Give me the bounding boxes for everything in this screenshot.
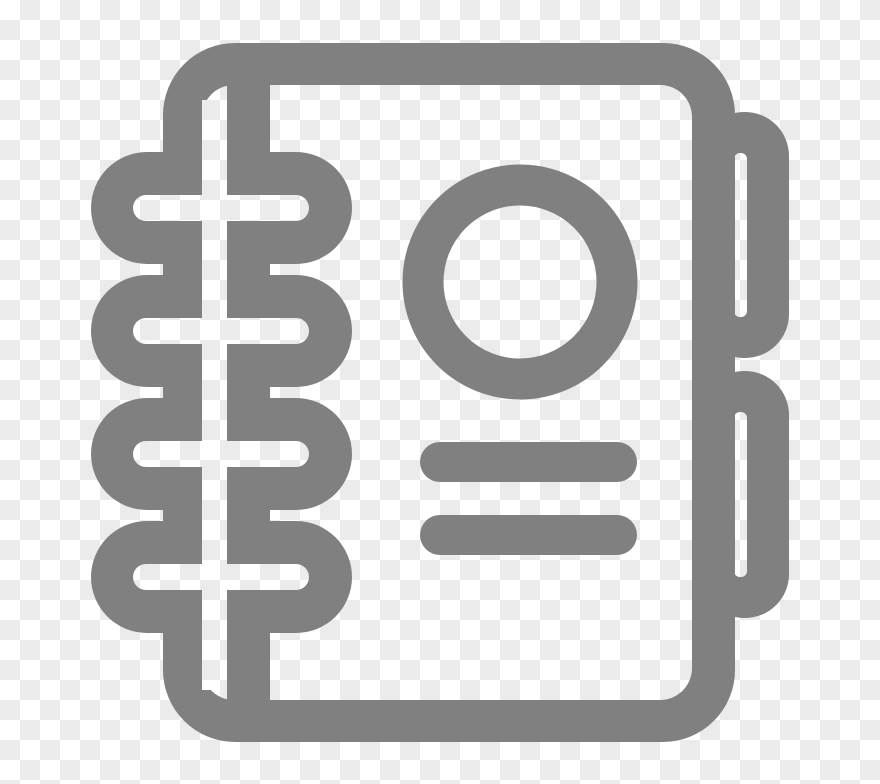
icon: ring slots xyxy=(133,195,309,590)
icon: book cover xyxy=(163,43,735,742)
icon: text lines xyxy=(440,462,617,535)
icon: spine gap xyxy=(202,100,227,690)
icon: right tabs xyxy=(700,112,789,618)
icon: spine xyxy=(227,85,270,700)
icon: avatar circle xyxy=(423,185,617,379)
icon: spiral rings xyxy=(91,152,352,633)
